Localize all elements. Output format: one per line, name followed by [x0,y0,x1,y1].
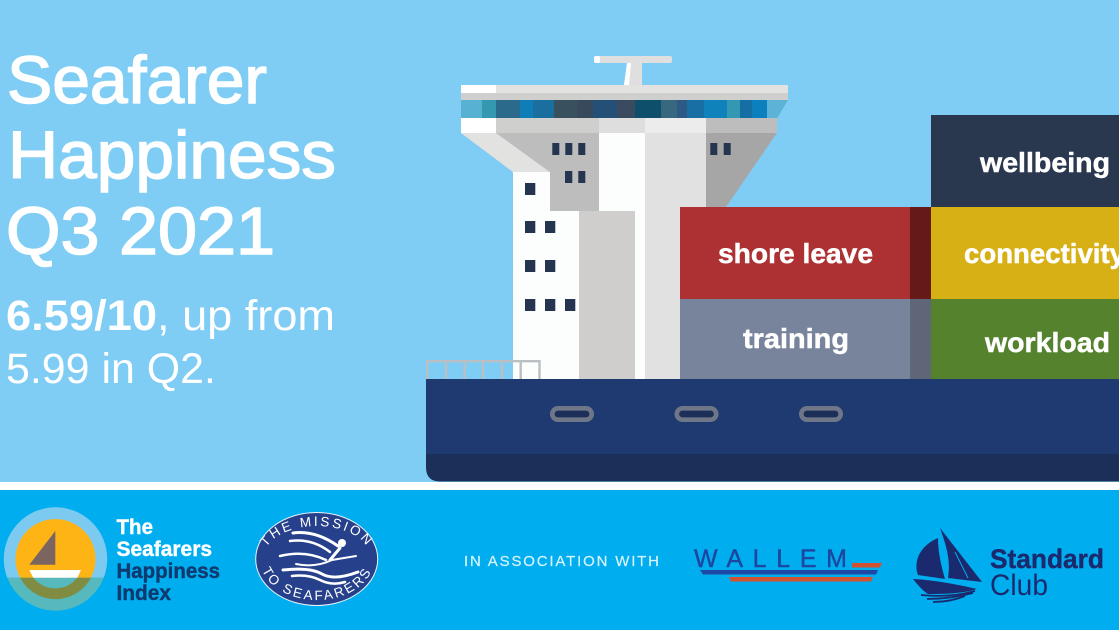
icon: sailboat [913,528,982,602]
logo lettering: THE MISSION [259,516,372,545]
logo lettering [259,516,372,600]
radar mast [594,56,672,85]
ship hull [426,379,1119,482]
ship superstructure [461,56,788,379]
container: workload [931,299,1119,379]
logo wordmark: Standard [990,544,1104,574]
logo: Seafarers Happiness Index [4,507,220,611]
tower [513,133,706,379]
logo: Standard Club: Club [990,569,1048,602]
logo: Wallem: WALLEM [694,545,847,573]
portholes [552,408,841,420]
logo: The Mission to Seafarers [255,512,378,606]
roof [461,85,788,100]
headline score text: 5.99 in Q2. [6,345,216,393]
wing underside [461,118,777,211]
headline score text: , up from [157,292,335,340]
container: shore leave [680,207,931,299]
logo wordmark [116,515,220,605]
footer band [0,490,1119,630]
icon: sun and boat [4,507,107,611]
container: connectivity [931,207,1119,299]
logo: Wallem [694,545,882,582]
container: shore leave: shore leave [718,238,873,269]
deck railing [427,361,540,379]
logo wordmark: Seafarers [116,537,212,561]
icon: flying angel [280,533,358,584]
container: training: training [743,323,849,354]
logo wordmark: Happiness [116,559,220,583]
association label: IN ASSOCIATION WITH [464,553,659,570]
title: Seafarer [7,43,267,118]
title [6,43,336,269]
headline score text [6,292,335,393]
logo wordmark: Index [116,581,171,605]
tower windows [525,143,731,311]
logo: Standard Club [913,528,1104,602]
title: Q3 2021 [6,194,275,269]
container: training [680,299,931,379]
headline score text: 6.59/10 [6,292,157,340]
container: wellbeing [931,115,1119,207]
logo wordmark: The [116,515,153,539]
bridge windows band [461,100,788,118]
container: wellbeing: wellbeing [979,147,1110,178]
title: Happiness [8,118,336,193]
logo lettering: TO SEAFARERS [264,566,370,600]
container: workload: workload [984,327,1110,358]
